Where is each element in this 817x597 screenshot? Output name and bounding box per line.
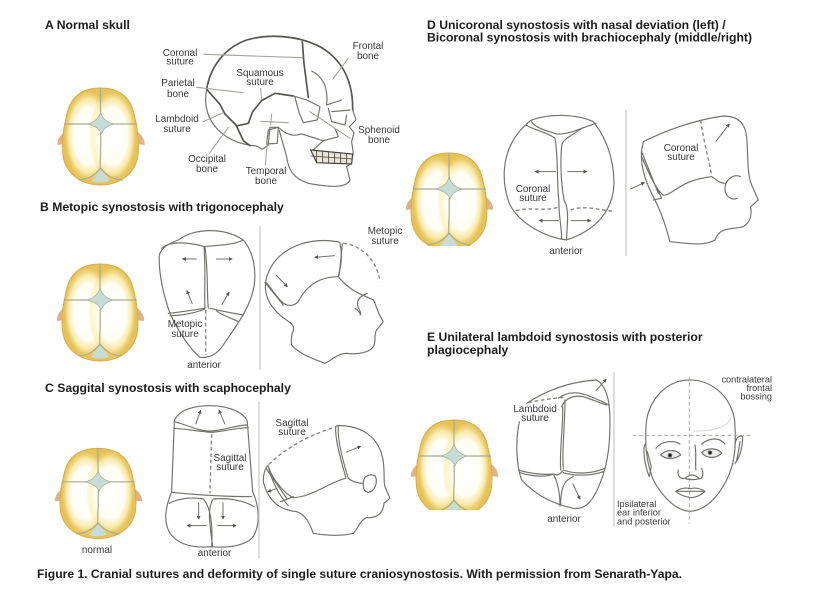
illustration: normal skull with caption: [55, 448, 142, 556]
title: E Unilateral lambdoid synostosis: plagiocephaly: [427, 343, 508, 357]
diagram: metopic top view: Metopic: [168, 319, 202, 330]
diagram: bicoronal top view: suture: [519, 193, 547, 204]
diagram: lateral skull with labelled sutures: bone: [368, 135, 390, 146]
illustration: lambdoid skull top view: [411, 420, 498, 517]
illustration: metopic skull top view: [57, 264, 144, 361]
diagram: metopic top view: anterior: [187, 360, 221, 371]
diagram: child face front view: and posterior: [617, 516, 671, 526]
skull line drawing: [197, 36, 356, 186]
diagram: lateral skull with labelled sutures: suture: [246, 77, 274, 88]
figure caption: Figure 1. Cranial sutures and deformity of single suture craniosynostosis. With permission from Senarath-Yapa.: [37, 567, 682, 581]
diagram: lateral skull with labelled sutures: Occipital: [188, 154, 226, 165]
title: A Normal skull: A Normal skull: [45, 18, 130, 32]
diagram: bicoronal lateral view: suture: [667, 152, 695, 163]
diagram: bicoronal lateral view: Coronal: [664, 143, 698, 154]
diagram: bicoronal top view: anterior: [549, 246, 583, 257]
diagram: lateral skull with labelled sutures: Sphenoid: [358, 125, 400, 136]
diagram: child face front view: [617, 374, 772, 526]
diagram: lateral skull with labelled sutures: bone: [196, 164, 218, 175]
diagram: lambdoid top view: Lambdoid: [513, 404, 557, 415]
diagram: bicoronal top view: [504, 115, 614, 257]
diagram: lateral skull with labelled sutures: bone: [357, 51, 379, 62]
illustration: normal skull top view: [57, 88, 145, 185]
diagram: sagittal top view: Sagittal: [214, 453, 246, 464]
diagram: metopic top view: suture: [171, 329, 199, 340]
diagram: bicoronal lateral view: [630, 116, 758, 244]
divider: [625, 110, 627, 256]
diagram: child face front view: contralateral: [721, 374, 772, 384]
diagram: metopic lateral view: Metopic: [368, 226, 402, 237]
diagram: lateral skull with labelled sutures: bone: [255, 176, 277, 187]
diagram: lateral skull with labelled sutures: [155, 36, 400, 187]
divider: [258, 402, 260, 558]
diagram: lateral skull with labelled sutures: Squamous: [236, 68, 284, 79]
diagram: child face front view: ear inferior: [617, 508, 661, 518]
title: E Unilateral lambdoid synostosis: E Unilateral lambdoid synostosis with posterior: [427, 330, 703, 344]
diagram: metopic lateral view: [265, 226, 402, 363]
title: B Metopic synostosis: B Metopic synostosis with trigonocephaly: [40, 200, 284, 214]
diagram: lambdoid top view: [513, 379, 610, 525]
diagram: child face front view: Ipsilateral: [617, 499, 656, 509]
title: D Unicoronal / Bicoronal synostosis: [427, 18, 752, 44]
title: C Saggital synostosis: C Saggital synostosis with scaphocephaly: [45, 381, 291, 395]
diagram: lambdoid top view: suture: [521, 413, 549, 424]
diagram: lateral skull with labelled sutures: Lambdoid: [155, 114, 199, 125]
diagram: lambdoid top view: anterior: [547, 514, 581, 525]
title: E Unilateral lambdoid synostosis: [427, 330, 703, 357]
diagram: sagittal lateral view: Sagittal: [276, 418, 308, 429]
labels: Coronal: [163, 48, 197, 59]
diagram: lateral skull with labelled sutures: suture: [166, 56, 194, 68]
diagram: sagittal lateral view: suture: [278, 427, 306, 438]
diagram: lateral skull with labelled sutures: suture: [163, 124, 191, 135]
diagram: sagittal top view: anterior: [198, 548, 232, 559]
illustration: normal skull with caption: normal: [82, 545, 112, 556]
diagram: sagittal lateral view: [263, 418, 390, 535]
divider: [613, 372, 615, 527]
diagram: lateral skull with labelled sutures: Parietal: [161, 78, 195, 89]
diagram: child face front view: bossing: [740, 392, 772, 402]
leader lines: [197, 54, 350, 165]
diagram: sagittal top view: suture: [216, 462, 244, 473]
diagram: child face front view: frontal: [746, 383, 772, 393]
diagram: lateral skull with labelled sutures: Temporal: [246, 166, 286, 177]
diagram: sagittal top view: [166, 406, 258, 559]
illustration: bicoronal skull top view: [406, 153, 493, 250]
diagram: bicoronal top view: Coronal: [516, 184, 550, 195]
diagram: metopic top view: [159, 231, 255, 371]
diagram: lateral skull with labelled sutures: bone: [167, 89, 189, 100]
divider: [259, 226, 261, 370]
diagram: metopic lateral view: suture: [371, 236, 399, 247]
diagram: lateral skull with labelled sutures: Frontal: [353, 41, 383, 52]
title: D Unicoronal / Bicoronal synostosis: Bicoronal synostosis with brachiocephaly (middle/right): [427, 30, 752, 44]
title: D Unicoronal / Bicoronal synostosis: D Unicoronal synostosis with nasal deviation (left) /: [427, 18, 726, 32]
